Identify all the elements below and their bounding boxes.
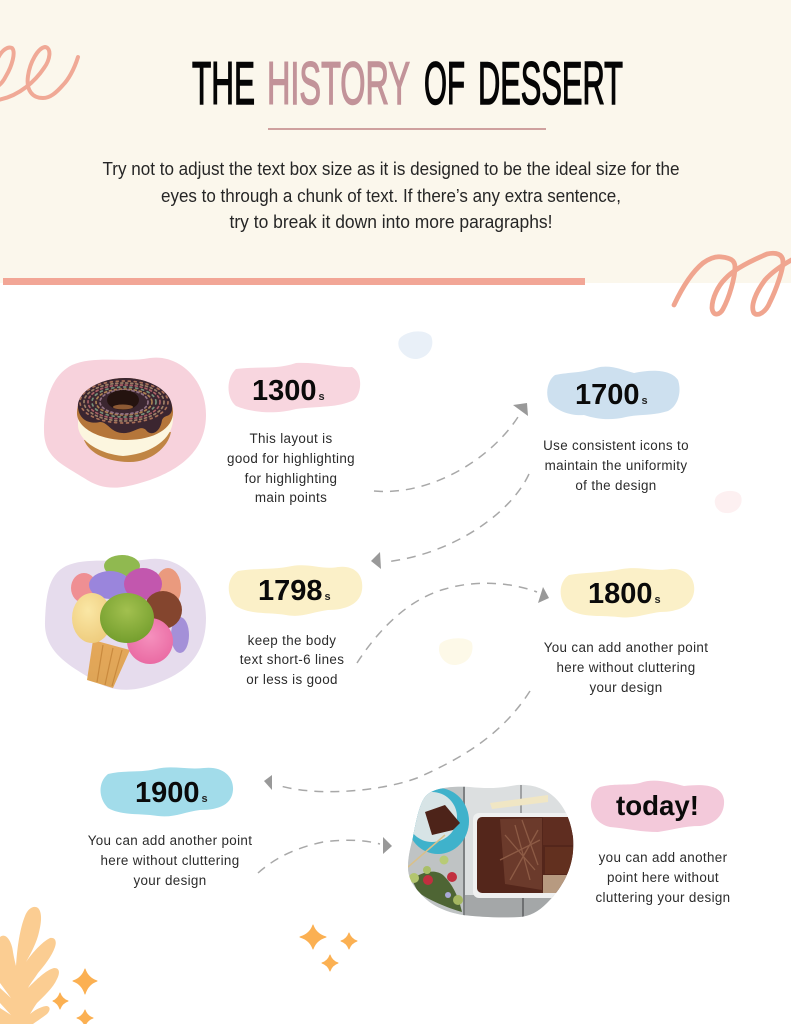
title underline xyxy=(268,128,546,130)
1900s badge xyxy=(100,767,233,816)
panel: 1798s xyxy=(45,555,362,690)
1900s body: your design xyxy=(133,873,207,888)
1798s body: keep the body xyxy=(248,633,336,648)
today badge xyxy=(591,781,724,832)
today body: cluttering your design xyxy=(596,890,730,905)
header panel xyxy=(0,0,791,283)
arrow: 1798s to 1800s xyxy=(357,583,549,663)
today body xyxy=(596,850,730,905)
1700s body: of the design xyxy=(575,478,657,493)
decorative scribble top right xyxy=(674,253,791,314)
1300s body: good for highlighting xyxy=(227,451,355,466)
faint yellow blob xyxy=(439,638,472,665)
1800s body xyxy=(544,640,708,695)
1798s label: 1798s xyxy=(258,575,331,607)
1700s body: Use consistent icons to xyxy=(543,438,689,453)
arrow: 1300s to 1700s xyxy=(374,403,528,491)
panel: 1900s xyxy=(88,767,252,888)
1800s label: 1800s xyxy=(588,578,661,610)
header accent bar xyxy=(3,278,585,285)
1300s body: for highlighting xyxy=(245,471,337,486)
title: DESSERT xyxy=(478,50,623,117)
icon: ice cream cone xyxy=(71,555,189,688)
1300s label: 1300s xyxy=(252,375,325,407)
faint pink blob xyxy=(715,491,742,513)
1800s badge xyxy=(561,568,694,617)
arrow: 1700s to 1798s xyxy=(371,474,529,569)
ice cream blob xyxy=(45,559,206,690)
1700s label: 1700s xyxy=(575,379,648,411)
today label: today! xyxy=(616,790,699,821)
1700s body: maintain the uniformity xyxy=(545,458,687,473)
1700s badge xyxy=(547,367,680,419)
title xyxy=(192,50,623,117)
1900s body: You can add another point xyxy=(88,833,252,848)
1300s badge xyxy=(228,363,360,412)
icon: sparkles left xyxy=(53,969,97,1024)
1800s body: here without cluttering xyxy=(556,660,696,675)
panel: today xyxy=(400,780,730,920)
1800s body: your design xyxy=(589,680,663,695)
1700s body xyxy=(543,438,689,493)
today body: you can add another xyxy=(599,850,728,865)
1798s body: or less is good xyxy=(246,672,338,687)
decorative scribble top left xyxy=(0,47,78,100)
1798s body xyxy=(240,633,344,687)
intro text: eyes to through a chunk of text. If there’s any extra sentence, xyxy=(161,185,621,206)
intro text: try to break it down into more paragraphs! xyxy=(230,211,552,232)
icon: donut xyxy=(77,378,173,462)
1900s body xyxy=(88,833,252,888)
panel: 1300s xyxy=(44,358,360,505)
title: THE xyxy=(192,50,255,117)
arrow: 1900s to today xyxy=(258,837,392,873)
photo: brownie tray xyxy=(408,784,574,918)
1798s body: text short-6 lines xyxy=(240,652,344,667)
title: OF xyxy=(424,50,465,117)
today body: point here without xyxy=(607,870,719,885)
donut blob xyxy=(44,358,206,488)
intro text: Try not to adjust the text box size as it is designed to be the ideal size for the xyxy=(102,158,680,179)
1300s body: This layout is xyxy=(249,431,333,446)
1900s body: here without cluttering xyxy=(100,853,240,868)
faint blue blob xyxy=(398,331,432,359)
panel: 1800s xyxy=(544,568,708,695)
1300s body: main points xyxy=(255,490,327,505)
title: HISTORY xyxy=(267,50,410,117)
1798s badge xyxy=(229,565,362,616)
intro text xyxy=(102,158,680,232)
1800s body: You can add another point xyxy=(544,640,708,655)
arrow: 1800s to 1900s xyxy=(264,691,530,792)
1900s label: 1900s xyxy=(135,777,208,809)
icon: leaf plant xyxy=(0,907,59,1024)
1300s body xyxy=(227,431,355,505)
icon: sparkles center xyxy=(300,925,357,971)
panel: 1700s xyxy=(543,367,689,493)
